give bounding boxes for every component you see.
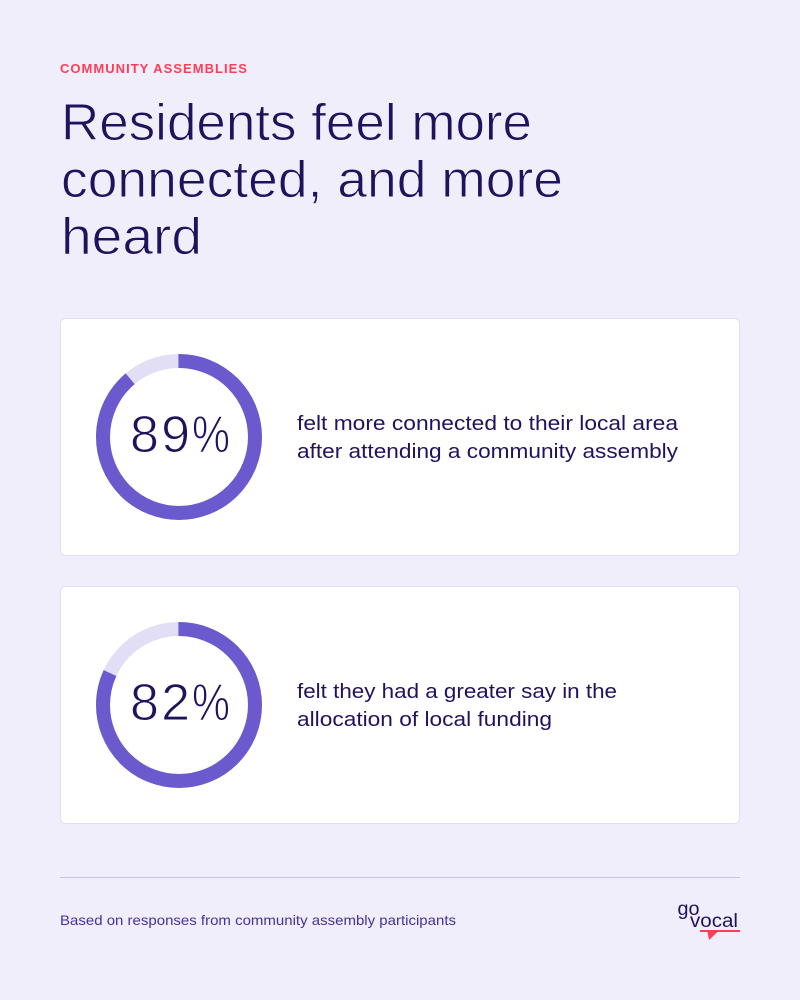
title: heard <box>61 208 202 266</box>
logo: go vocal: go <box>678 899 700 920</box>
stat description: connected: felt more connected to their local area <box>297 412 679 435</box>
donut chart: 82% <box>103 629 255 781</box>
panel: 82% greater say <box>60 586 740 824</box>
stat value: 89%: % <box>192 406 230 464</box>
stat value: 89% <box>130 406 230 464</box>
title <box>61 94 563 266</box>
eyebrow label: COMMUNITY ASSEMBLIES <box>60 61 248 76</box>
title: connected, and more <box>61 151 563 209</box>
stat value: 82% <box>130 674 230 732</box>
stat description: connected <box>297 412 679 463</box>
donut chart: 89% <box>103 361 255 513</box>
stat value: 82%: % <box>192 674 230 732</box>
stat description: greater say: felt they had a greater say in the <box>297 680 617 703</box>
panel background <box>60 318 740 556</box>
footnote: Based on responses from community assembly participants <box>60 912 456 928</box>
panel: 89% connected <box>60 318 740 556</box>
logo: go vocal: vocal <box>690 911 738 932</box>
logo: go vocal <box>678 899 740 940</box>
panel background <box>60 586 740 824</box>
icon: speech bubble underline <box>700 930 740 940</box>
stat description: greater say: allocation of local funding <box>297 708 552 731</box>
footer divider <box>60 877 740 878</box>
stat description: connected: after attending a community assembly <box>297 440 679 463</box>
stat value: 89%: 89 <box>130 406 190 464</box>
stat description: greater say <box>297 680 617 731</box>
title: Residents feel more <box>61 94 532 152</box>
stat value: 82%: 82 <box>130 674 190 732</box>
